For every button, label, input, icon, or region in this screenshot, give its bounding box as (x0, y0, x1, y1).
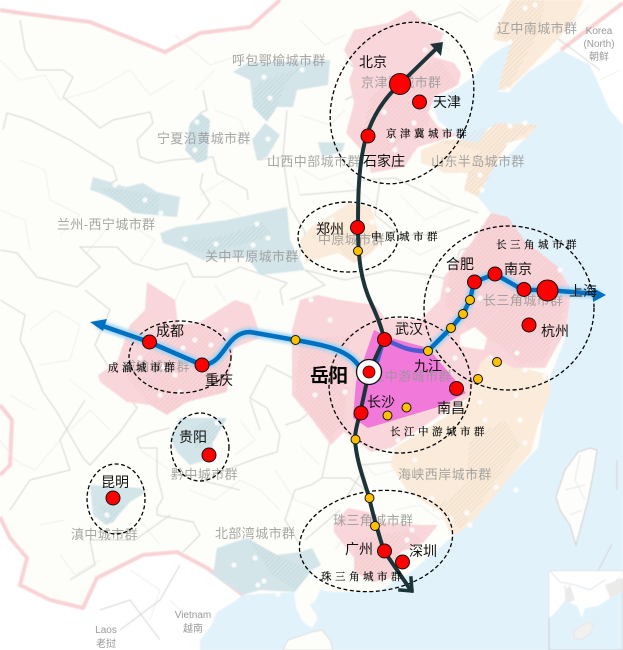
city: Hefei: 合肥 (446, 256, 474, 272)
city: Kunming: 昆明 (101, 474, 129, 490)
red city nodes (106, 74, 558, 569)
north-south railway (355, 44, 441, 589)
label: Korea (583, 26, 615, 63)
grey: Dianzhong: 滇中城市群 (71, 527, 138, 542)
cluster: Ningxia (185, 113, 210, 163)
ellipse: Jingjinji (303, 0, 501, 209)
cluster: Chengdu-Chongqing (98, 282, 260, 415)
east-west blue corridor (100, 274, 597, 368)
ellipse: Middle Yangtze (329, 317, 471, 453)
cluster: West Strait (391, 355, 551, 535)
cluster: Beibu Gulf (213, 538, 321, 595)
city: Wuhan: 武汉 (395, 321, 423, 337)
label: Korea: 朝鲜 (589, 50, 609, 63)
title: Zhongyuan: 中原城市群 (371, 230, 441, 243)
cluster: Liaozhongnan (494, 0, 584, 90)
cluster: Guanzhong (160, 207, 305, 275)
ellipse: Zhongyuan (298, 202, 398, 272)
grey: Lanzhou: 兰州-西宁城市群 (57, 217, 156, 232)
grey: West Strait: 海峡西岸城市群 (398, 467, 492, 482)
cluster: Hubao-Eyu (233, 60, 330, 122)
Hainan island (283, 630, 333, 650)
city: Zhengzhou: 郑州 (316, 221, 344, 237)
title: Pearl River: 珠三角城市群 (321, 570, 405, 583)
cluster: Lanzhou-Xining (90, 177, 180, 217)
cluster: Guizhou (170, 418, 227, 465)
cluster: Yunnan (90, 485, 146, 525)
islands and marks (616, 460, 618, 490)
grey: Yangtze delta: 长三角城市群 (483, 293, 563, 308)
city: Chongqing: 重庆 (205, 372, 233, 388)
city: Nanjing: 南京 (504, 261, 532, 277)
ellipse: Yangtze delta (424, 226, 594, 390)
city: Nanchang: 南昌 (437, 400, 465, 416)
title: Yangtze delta: 长三角城市群 (496, 238, 580, 251)
arrow: east (593, 288, 606, 302)
label: Vietnam: 越南 (183, 622, 203, 635)
grey: Guanzhong: 关中平原城市群 (205, 249, 299, 264)
grey: Ningxia: 宁夏沿黄城市群 (157, 131, 251, 146)
title: Middle Yangtze: 长江中游城市群 (390, 425, 488, 438)
title: Chengyu: 成渝城市群 (108, 361, 178, 374)
ellipse: Kunming (87, 464, 145, 534)
grey: Liaoning: 辽中南城市群 (497, 21, 577, 36)
arrow: north (430, 42, 443, 56)
label: Vietnam: Vietnam (175, 610, 211, 621)
title: Jingjinji: 京津冀城市群 (386, 127, 470, 140)
arrow: south (400, 578, 412, 591)
arrow: west (90, 319, 107, 331)
label: Vietnam (175, 610, 211, 635)
north of border: Mongolia (0, 0, 280, 52)
ellipse: Chengyu (129, 321, 231, 393)
grey: Qianzhong: 黔中城市群 (171, 467, 238, 482)
South China Sea inset (549, 544, 623, 650)
yellow station nodes (291, 246, 502, 530)
grey: Middle Yangtze: 长江中游城市群 (358, 369, 452, 384)
city: Beijing: 北京 (359, 54, 387, 70)
city: Guiyang: 贵阳 (179, 429, 207, 445)
cluster: Beijing-Tianjin-Hebei (344, 10, 461, 173)
grey: Hohhot: 呼包鄂榆城市群 (232, 53, 326, 68)
purple link Wuhan-Jiujiang (376, 339, 428, 365)
grey: Pearl River: 珠三角城市群 (333, 513, 413, 528)
cluster: Yangtze delta and middle (292, 213, 571, 452)
city: Tianjin: 天津 (433, 94, 461, 110)
sea (200, 43, 623, 650)
label: Korea: (North) (583, 39, 615, 50)
north korea (561, 3, 623, 125)
south: Vietnam and Laos (0, 517, 243, 650)
label: Laos: Laos (95, 625, 117, 636)
grey cluster names (57, 21, 577, 542)
label: Korea: Korea (586, 26, 613, 37)
label: Laos: 老挝 (96, 637, 116, 650)
grey: Zhongyuan: 中原城市群 (318, 232, 385, 247)
Yueyang marker (356, 360, 382, 384)
Taiwan (556, 448, 597, 545)
ellipse: Pearl River (293, 481, 459, 601)
grey: Shanxi: 山西中部城市群 (267, 154, 361, 169)
grey: Chengyu: 成渝城市群 (123, 359, 190, 374)
city: Hangzhou: 杭州 (541, 323, 569, 339)
city: Guangzhou: 广州 (345, 541, 373, 557)
city: Shanghai: 上海 (569, 283, 597, 299)
city: Changsha: 长沙 (367, 394, 395, 410)
grey: Beibu Gulf: 北部湾城市群 (215, 526, 295, 541)
city names (101, 54, 597, 559)
dashed cluster ellipses (87, 0, 594, 601)
Hainan in inset (574, 622, 594, 640)
blue glow (100, 274, 597, 368)
grey: Jingjinji: 京津冀城市群 (361, 75, 441, 90)
city: Shenzhen: 深圳 (409, 543, 437, 559)
city: Shijiazhuang: 石家庄 (363, 153, 405, 169)
cluster: Shandong (421, 123, 538, 197)
label: Laos (95, 625, 117, 650)
city: Yueyang: 岳阳 (310, 365, 348, 387)
magenta Yueyang region (353, 330, 466, 428)
cluster titles (108, 127, 580, 583)
white dots (104, 2, 563, 597)
blue line (100, 274, 597, 368)
cluster: Zhongyuan (300, 203, 384, 263)
ellipse: Guiyang (171, 413, 229, 481)
city: Jiujiang: 九江 (414, 358, 442, 374)
city: Chengdu: 成都 (156, 323, 184, 339)
cluster: Shanxi central (252, 123, 345, 160)
cluster: Pearl River Delta (334, 508, 438, 582)
grey: Shandong: 山东半岛城市群 (431, 154, 525, 169)
gap in the Yangtze cluster (460, 327, 487, 350)
